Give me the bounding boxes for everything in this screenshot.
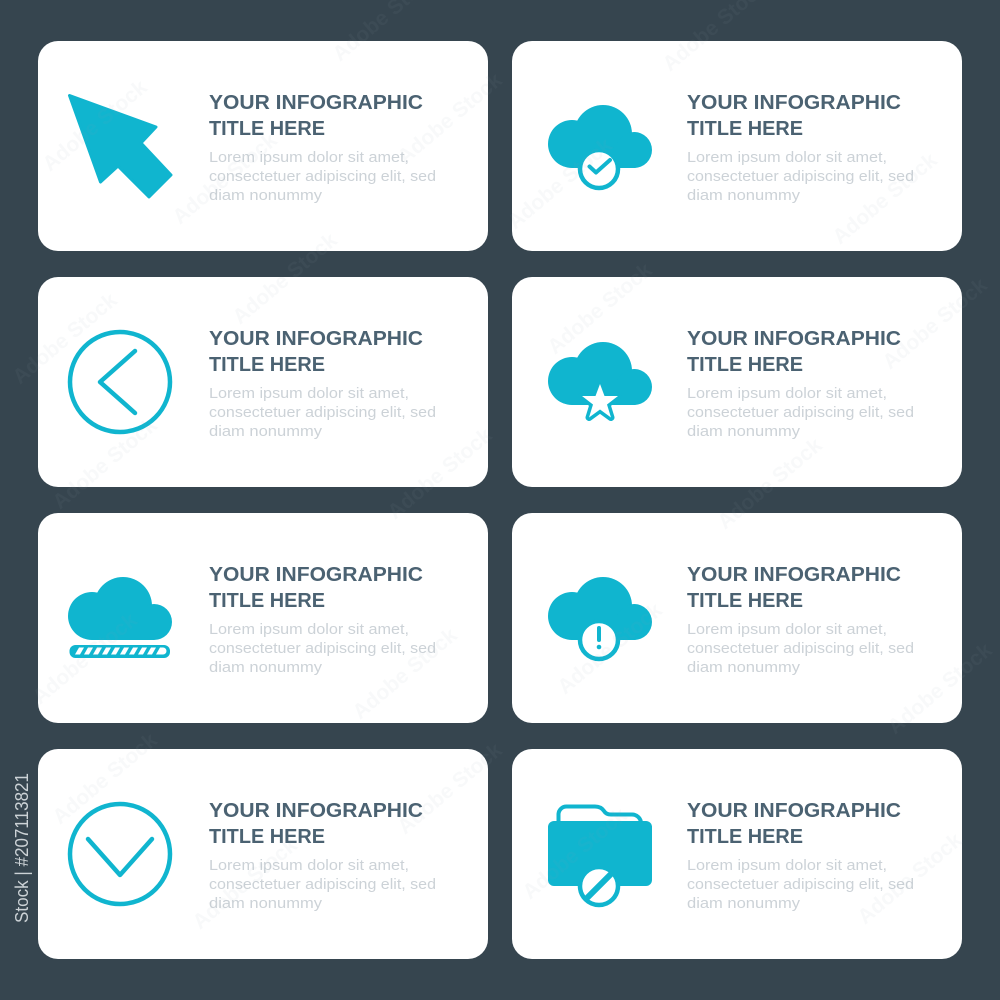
text: title and description: diam nonummy	[209, 895, 323, 912]
watermark: Adobe Stock	[48, 729, 162, 829]
watermark: Adobe Stock	[543, 259, 657, 359]
stock id label: Stock | #207113821	[12, 773, 32, 923]
text: title and description: consectetuer adipiscing elit, sed	[209, 168, 436, 185]
watermark: Adobe Stock	[38, 76, 152, 176]
watermark: Adobe Stock	[853, 829, 967, 929]
watermark: Adobe Stock	[713, 434, 827, 534]
text: title and description: consectetuer adipiscing elit, sed	[687, 876, 914, 893]
watermark: Adobe Stock	[883, 639, 997, 739]
text: title and description: YOUR INFOGRAPHIC	[687, 800, 901, 822]
watermark: Adobe Stock	[28, 609, 142, 709]
watermark: Adobe Stock	[168, 129, 282, 229]
text: title and description: YOUR INFOGRAPHIC	[209, 564, 423, 586]
text: title and description: YOUR INFOGRAPHIC	[687, 328, 901, 350]
text: title and description: TITLE HERE	[687, 354, 803, 376]
icon: cloud with progress bar	[68, 577, 172, 658]
text: title and description: TITLE HERE	[687, 826, 803, 848]
watermark: Adobe Stock	[503, 134, 617, 234]
text: title and description: consectetuer adipiscing elit, sed	[209, 404, 436, 421]
panel: row 4 right	[512, 749, 962, 959]
text: title and description: Lorem ipsum dolor sit amet,	[209, 385, 409, 402]
text: title and description: diam nonummy	[687, 895, 801, 912]
text: title and description: TITLE HERE	[687, 590, 803, 612]
text: title and description: TITLE HERE	[209, 826, 325, 848]
watermark: Adobe Stock	[48, 414, 162, 514]
text: title and description: Lorem ipsum dolor sit amet,	[687, 385, 887, 402]
text: title and description: TITLE HERE	[687, 118, 803, 140]
text: title and description: consectetuer adipiscing elit, sed	[209, 876, 436, 893]
text: title and description: TITLE HERE	[209, 354, 325, 376]
text: title and description: diam nonummy	[209, 187, 323, 204]
watermark: Adobe Stock	[348, 624, 462, 724]
watermark: Adobe Stock	[383, 424, 497, 524]
panel: row 1 left	[38, 41, 488, 251]
text: title and description: YOUR INFOGRAPHIC	[687, 564, 901, 586]
icon: cloud with check badge	[548, 105, 652, 188]
watermark: Adobe Stock	[878, 274, 992, 374]
text: title and description: Lorem ipsum dolor sit amet,	[209, 149, 409, 166]
watermark: Adobe Stock	[228, 229, 342, 329]
text: title and description: Lorem ipsum dolor sit amet,	[687, 857, 887, 874]
text: title and description: consectetuer adipiscing elit, sed	[687, 404, 914, 421]
text: title and description	[687, 92, 914, 204]
panel: row 4 left	[38, 749, 488, 959]
watermark: Adobe Stock	[828, 149, 942, 249]
watermark: Adobe Stock	[393, 739, 507, 839]
watermark: Adobe Stock	[8, 289, 122, 389]
text: title and description	[209, 564, 436, 676]
text: title and description: Lorem ipsum dolor sit amet,	[209, 621, 409, 638]
icon: left chevron circle	[70, 332, 170, 432]
panel: row 3 left	[38, 513, 488, 723]
text: title and description: YOUR INFOGRAPHIC	[209, 328, 423, 350]
text: title and description: TITLE HERE	[209, 590, 325, 612]
text: title and description: TITLE HERE	[209, 118, 325, 140]
watermark: Adobe Stock	[393, 69, 507, 169]
text: title and description: YOUR INFOGRAPHIC	[687, 92, 901, 114]
icon: cursor arrow	[70, 96, 171, 197]
text: title and description: diam nonummy	[209, 659, 323, 676]
text: title and description: consectetuer adipiscing elit, sed	[687, 168, 914, 185]
panel: row 1 right	[512, 41, 962, 251]
text: title and description: YOUR INFOGRAPHIC	[209, 800, 423, 822]
text: title and description: Lorem ipsum dolor sit amet,	[687, 149, 887, 166]
text: title and description: Lorem ipsum dolor sit amet,	[209, 857, 409, 874]
text: title and description	[687, 564, 914, 676]
text: title and description	[209, 328, 436, 440]
text: title and description: consectetuer adipiscing elit, sed	[687, 640, 914, 657]
icon: cloud with alert badge	[548, 577, 652, 659]
text: title and description: YOUR INFOGRAPHIC	[209, 92, 423, 114]
text: title and description: diam nonummy	[687, 187, 801, 204]
watermark: Adobe Stock	[188, 834, 302, 934]
text: title and description	[687, 800, 914, 912]
text: title and description	[209, 800, 436, 912]
text: title and description	[209, 92, 436, 204]
text: title and description: diam nonummy	[687, 659, 801, 676]
icon: cloud with star	[548, 342, 652, 418]
icon: folder with blocked badge	[548, 806, 652, 905]
text: title and description	[687, 328, 914, 440]
text: title and description: consectetuer adipiscing elit, sed	[209, 640, 436, 657]
panel: row 2 right	[512, 277, 962, 487]
text: title and description: Lorem ipsum dolor sit amet,	[687, 621, 887, 638]
watermark: Adobe Stock	[553, 599, 667, 699]
panel: row 3 right	[512, 513, 962, 723]
text: title and description: diam nonummy	[687, 423, 801, 440]
watermark: Adobe Stock	[518, 804, 632, 904]
text: title and description: diam nonummy	[209, 423, 323, 440]
icon: down chevron circle	[70, 804, 170, 904]
panel: row 2 left	[38, 277, 488, 487]
